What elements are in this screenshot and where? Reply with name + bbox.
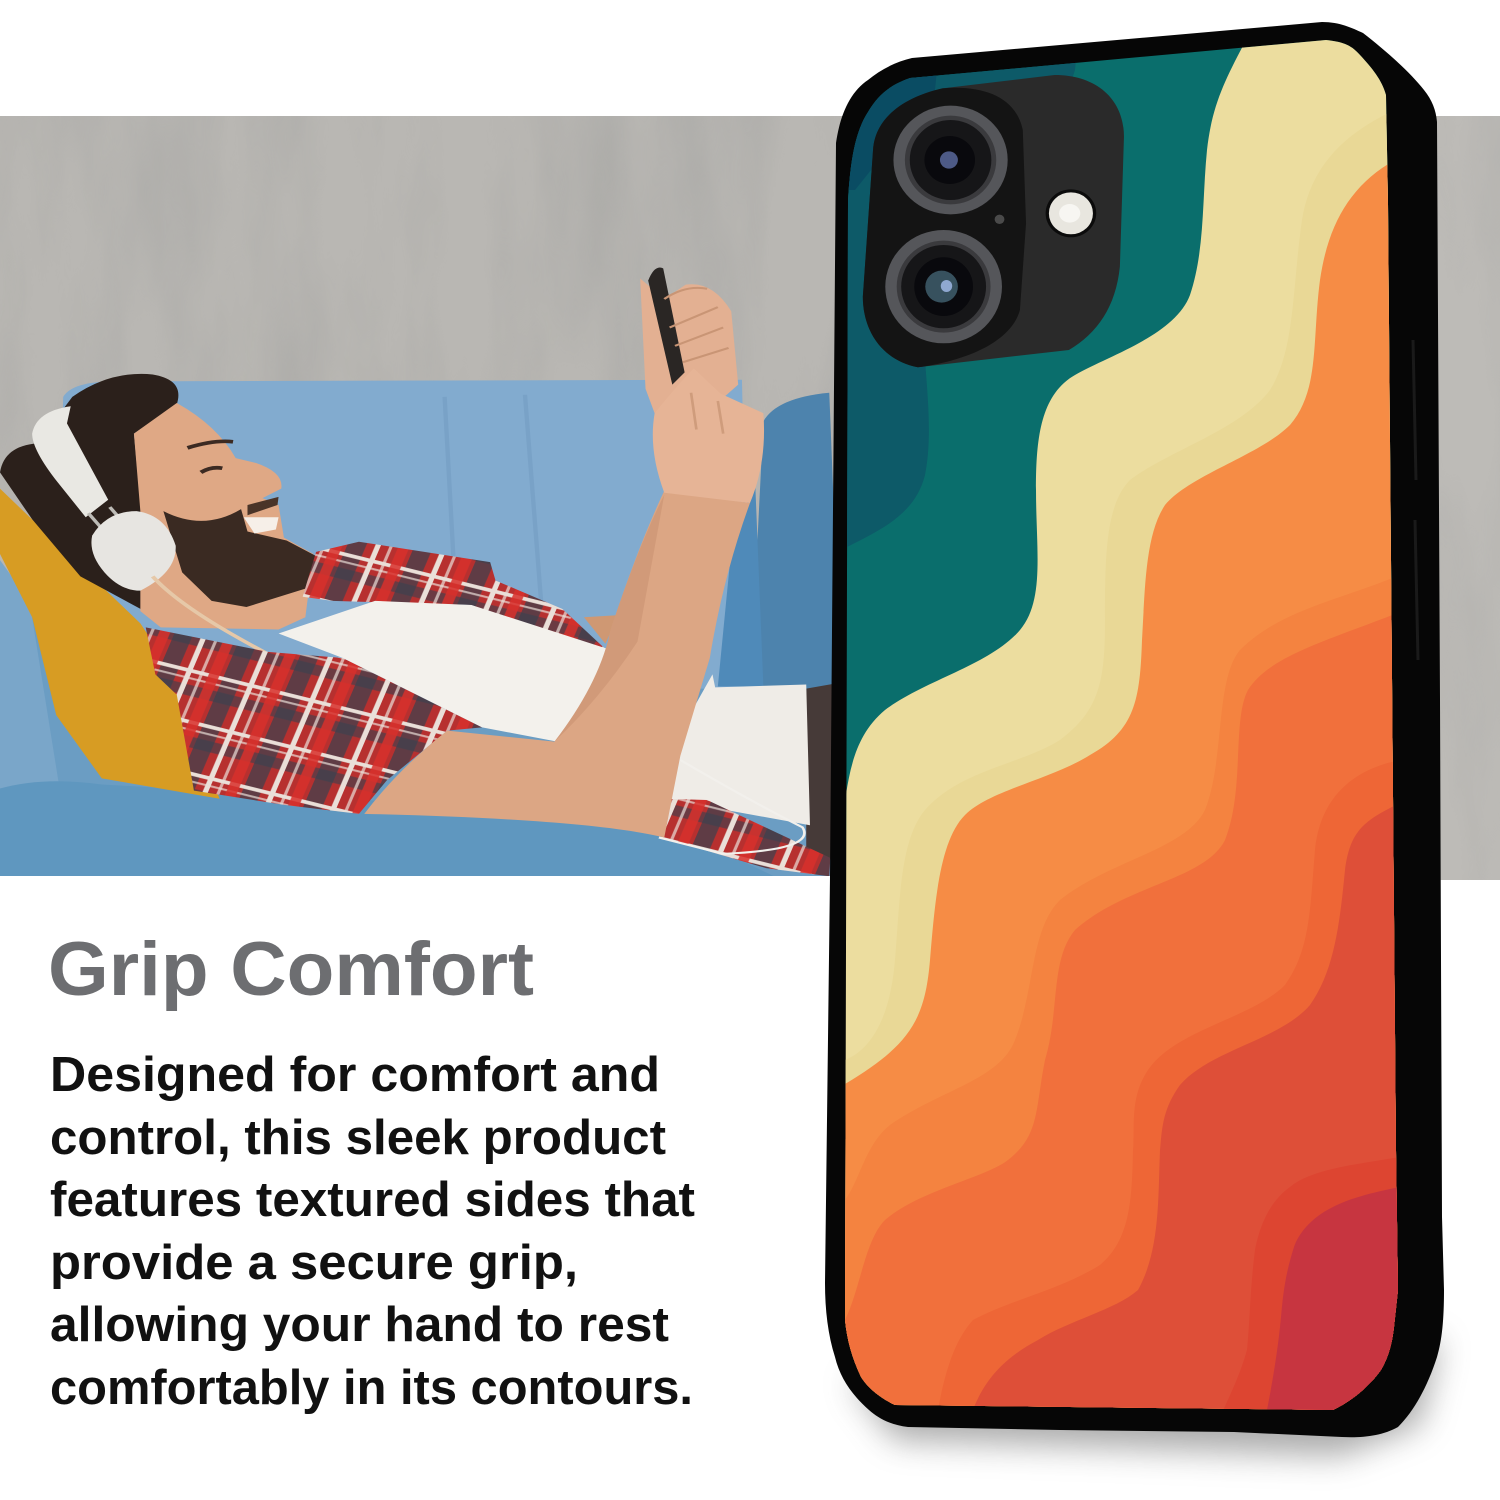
far legs and shirt hem [806, 684, 832, 860]
wall [0, 116, 842, 574]
flash [1046, 189, 1096, 237]
earphone cable [658, 821, 806, 855]
beard [163, 509, 316, 607]
deeper orange wave [937, 760, 1410, 1415]
case body [825, 22, 1444, 1437]
upper lens [893, 106, 1008, 214]
lens housing [863, 88, 1026, 367]
body text: control, this sleek product [50, 1111, 666, 1165]
side button [1413, 340, 1418, 660]
body text: features textured sides that [50, 1173, 695, 1227]
red wave [971, 803, 1410, 1415]
microphone dot [995, 215, 1004, 224]
holding hand and phone [640, 268, 764, 503]
white t-shirt [279, 601, 810, 825]
arm [364, 491, 750, 838]
back panel with waves [840, 30, 1410, 1450]
hair [0, 374, 178, 611]
headphones [32, 406, 268, 652]
orange band [845, 575, 1410, 1450]
wall strip right of phone [1420, 116, 1500, 880]
plaid shirt [146, 542, 605, 814]
darkest teal layer [848, 76, 936, 190]
body text: provide a secure grip, [50, 1236, 578, 1290]
body text [50, 1048, 695, 1415]
moustache [247, 497, 279, 515]
darker cream band [845, 110, 1410, 1450]
mouth [244, 517, 279, 534]
eye and brow [187, 441, 233, 472]
yellow pillow [0, 489, 220, 799]
crimson wave [1267, 1188, 1398, 1410]
heading: Grip Comfort [48, 927, 534, 1012]
cream wave [845, 40, 1410, 1450]
deep red wave [1224, 1158, 1398, 1410]
dark teal layer [847, 62, 1076, 546]
camera module [863, 75, 1124, 367]
body text: allowing your hand to rest [50, 1298, 669, 1352]
phone drop shadow [850, 1340, 1440, 1456]
mid orange wave [845, 612, 1410, 1450]
face and neck [134, 403, 313, 629]
camera bump [863, 75, 1124, 367]
phone case [825, 22, 1444, 1450]
photo: man on sofa with headphones [0, 116, 845, 878]
body text: Designed for comfort and [50, 1048, 660, 1102]
shirt hem lower right [662, 799, 830, 876]
teal base [840, 30, 1410, 830]
light orange wave [845, 160, 1410, 1450]
body text: comfortably in its contours. [50, 1361, 693, 1415]
sofa [0, 380, 841, 878]
lower lens [885, 230, 1002, 343]
